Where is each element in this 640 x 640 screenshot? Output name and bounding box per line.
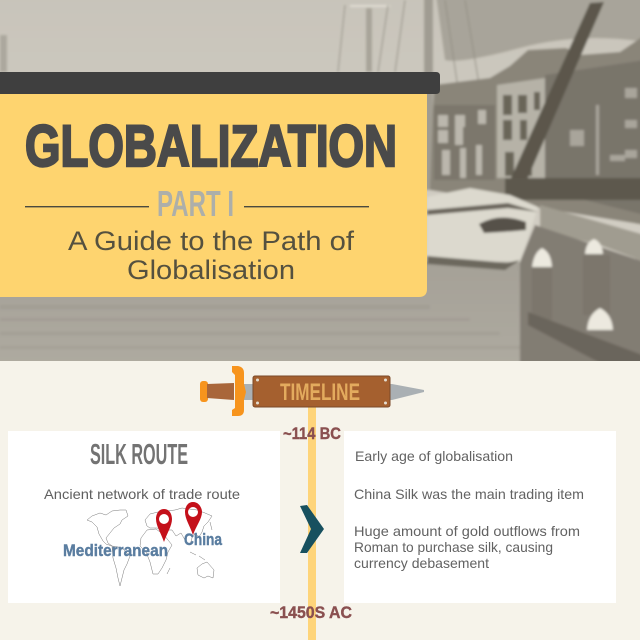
silk route description: Ancient network of trade route <box>44 486 240 502</box>
point: gold outflows: Huge amount of gold outflows from <box>354 523 580 539</box>
point: early age: Early age of globalisation <box>355 448 513 464</box>
title: GLOBALIZATION <box>25 114 397 179</box>
card background <box>8 431 280 603</box>
subtitle: A Guide to the Path of <box>68 226 355 256</box>
board rivets <box>256 378 387 404</box>
part I divider left <box>25 206 149 207</box>
part I divider right <box>244 206 369 207</box>
icon: sword timeline banner <box>200 366 424 416</box>
sword blade <box>240 384 424 400</box>
point: china silk: China Silk was the main trading item <box>354 486 584 502</box>
map label China: China <box>184 530 222 549</box>
date label: 1450s AC: ~1450S AC <box>270 603 352 622</box>
world map <box>87 508 214 586</box>
icon: map pin China <box>185 502 202 535</box>
point: gold outflows <box>354 523 580 571</box>
date label: 114 BC: ~114 BC <box>283 424 341 443</box>
point: gold outflows: currency debasement <box>354 555 489 571</box>
subtitle: Globalisation <box>127 255 295 285</box>
subtitle <box>68 226 355 285</box>
timeline vertical line <box>308 405 316 640</box>
sword guard <box>232 366 246 416</box>
card background <box>344 431 616 603</box>
banner dark top bar <box>0 72 440 94</box>
banner yellow panel <box>0 92 427 297</box>
wooden board <box>253 376 390 407</box>
icon: teal chevron <box>300 505 324 553</box>
sword pommel <box>200 381 208 402</box>
part I label: PART I <box>157 183 234 224</box>
panel: silk route left card <box>8 431 280 603</box>
icon: map pin Mediterranean <box>156 509 172 542</box>
timeline heading: TIMELINE <box>280 379 360 406</box>
silk route heading: SILK ROUTE <box>90 439 188 471</box>
header photo: harbour with ship <box>0 0 640 366</box>
point: gold outflows: Roman to purchase silk, causing <box>354 539 553 555</box>
panel: silk route right card <box>344 431 616 603</box>
header banner <box>0 72 440 297</box>
map label Mediterranean: Mediterranean <box>63 541 168 560</box>
sword grip <box>207 383 234 400</box>
